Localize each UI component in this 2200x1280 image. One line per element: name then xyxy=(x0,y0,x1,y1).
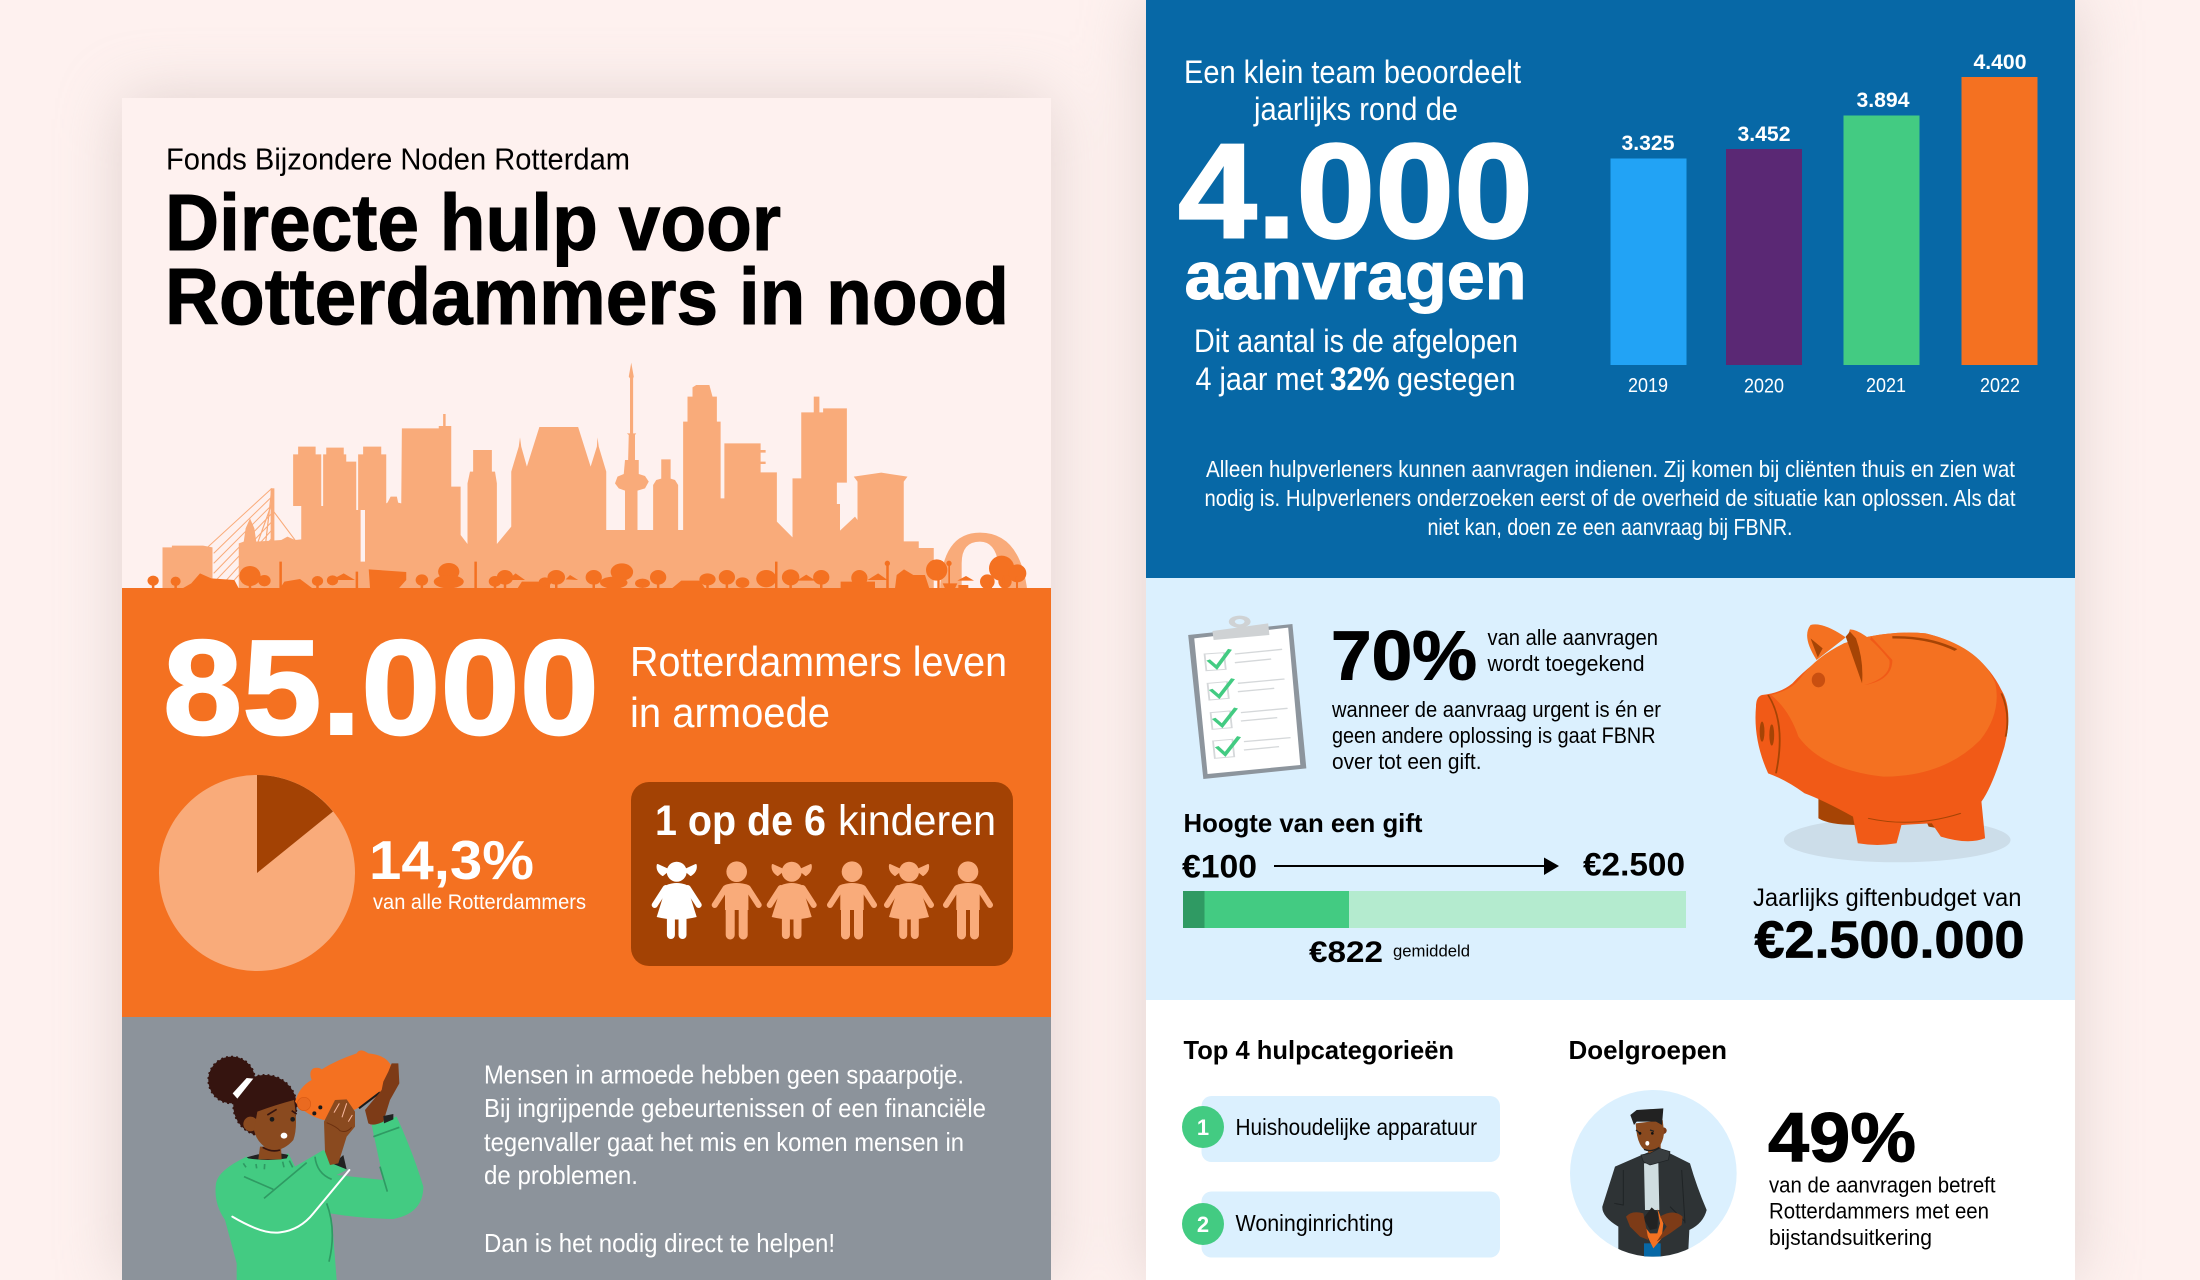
category 1: Huishoudelijke apparatuur xyxy=(1236,1114,1477,1140)
pie value: 14,3% xyxy=(369,829,534,891)
blue background xyxy=(1146,0,2075,578)
big word: aanvragen xyxy=(1184,238,1526,314)
illustration: man with empty wallet xyxy=(1570,1090,1737,1258)
growth text: 4 jaar met xyxy=(1196,361,1324,397)
explanation paragraph: niet kan, doen ze een aanvraag bij FBNR. xyxy=(1428,514,1792,540)
bar chart: 2020 xyxy=(1744,376,1784,398)
bar chart xyxy=(1610,51,2038,398)
stat caption xyxy=(1769,1172,1996,1250)
growth text xyxy=(1194,323,1518,397)
pie caption: van alle Rotterdammers xyxy=(373,891,586,914)
heading: top 4: Top 4 hulpcategorieën xyxy=(1184,1035,1454,1065)
panel: orange poverty stats xyxy=(122,588,1051,1017)
range max: €2.500 xyxy=(1583,846,1685,882)
panel: light blue gifts xyxy=(1146,578,2075,1000)
explanation paragraph: Alleen hulpverleners kunnen aanvragen indienen. Zij komen bij cliënten thuis en zien wat xyxy=(1206,456,2016,482)
pie chart xyxy=(159,775,355,971)
icon: piggy bank xyxy=(1755,624,2011,862)
body text xyxy=(484,1060,986,1258)
title xyxy=(165,178,1009,341)
big number: 85.000 xyxy=(163,612,599,763)
illustration: Rotterdam skyline xyxy=(148,363,1027,591)
body text: tegenvaller gaat het mis en komen mensen in xyxy=(484,1127,964,1157)
icon: clipboard checklist xyxy=(1188,616,1306,779)
callout heading xyxy=(655,797,996,845)
white background xyxy=(1146,1000,2075,1280)
intro text: jaarlijks rond de xyxy=(1253,91,1458,127)
big number caption: in armoede xyxy=(630,689,830,736)
growth text: Dit aantal is de afgelopen xyxy=(1194,323,1518,359)
big number: 4.000 xyxy=(1178,116,1533,266)
grey background xyxy=(122,1017,1051,1280)
panel: grey piggy bank text xyxy=(122,1017,1051,1280)
average caption: gemiddeld xyxy=(1393,942,1470,960)
condition text: wanneer de aanvraag urgent is én er xyxy=(1331,697,1661,722)
body text: Mensen in armoede hebben geen spaarpotje. xyxy=(484,1060,964,1090)
range bar xyxy=(1183,891,1686,928)
body text: Bij ingrijpende gebeurtenissen of een financiële xyxy=(484,1093,986,1123)
kicker: Fonds Bijzondere Noden Rotterdam xyxy=(166,142,630,176)
panel: blue applications xyxy=(1146,0,2075,578)
header background xyxy=(122,98,1051,590)
category 2: 2 xyxy=(1197,1212,1209,1237)
heading: gift size: Hoogte van een gift xyxy=(1184,808,1423,838)
illustration: woman looking into piggy bank xyxy=(208,1050,423,1280)
bar chart: 3.894 xyxy=(1856,89,1910,112)
bar chart: 3.325 xyxy=(1622,132,1675,155)
title: Directe hulp voor xyxy=(165,178,781,267)
average value: €822 xyxy=(1309,936,1383,969)
explanation paragraph: nodig is. Hulpverleners onderzoeken eerst of de overheid de situatie kan oplossen. Als dat xyxy=(1204,485,2016,511)
panel: white categories and target groups xyxy=(1146,1000,2075,1280)
stat caption: Rotterdammers met een xyxy=(1769,1198,1989,1224)
category 2: Woninginrichting xyxy=(1236,1210,1394,1236)
light blue background xyxy=(1146,578,2075,1000)
category 1 xyxy=(1182,1096,1500,1162)
icon: child figures xyxy=(655,861,990,935)
stat caption: van alle aanvragen xyxy=(1488,625,1658,650)
growth text: 32% xyxy=(1330,361,1390,397)
bar chart: 2019 xyxy=(1628,375,1668,397)
intro text: Een klein team beoordeelt xyxy=(1184,54,1521,90)
category 1: 1 xyxy=(1197,1115,1209,1140)
big number caption: Rotterdammers leven xyxy=(630,638,1007,685)
condition text xyxy=(1331,697,1661,774)
body text: Dan is het nodig direct te helpen! xyxy=(484,1228,835,1258)
callout: children xyxy=(631,782,1013,966)
bar chart: 2022 xyxy=(1980,375,2020,397)
stat caption: bijstandsuitkering xyxy=(1769,1225,1932,1250)
bar chart: 4.400 xyxy=(1974,51,2026,74)
big number caption xyxy=(630,638,1007,736)
callout heading: 1 op de 6 xyxy=(655,797,826,845)
intro text xyxy=(1184,54,1521,127)
budget value: €2.500.000 xyxy=(1754,912,2024,970)
budget label: Jaarlijks giftenbudget van xyxy=(1753,884,2022,912)
explanation paragraph xyxy=(1204,456,2016,540)
growth text: gestegen xyxy=(1397,361,1516,397)
panel: left poverty column xyxy=(122,98,1051,1280)
stat caption xyxy=(1487,625,1658,676)
condition text: over tot een gift. xyxy=(1332,749,1482,774)
stat: 70%: 70% xyxy=(1331,616,1477,694)
title: Rotterdammers in nood xyxy=(165,252,1009,341)
bar chart: 3.452 xyxy=(1738,123,1790,146)
stat: 49%: 49% xyxy=(1768,1098,1916,1176)
heading: target groups: Doelgroepen xyxy=(1568,1035,1727,1065)
arrow xyxy=(1274,858,1559,875)
bar chart: 2021 xyxy=(1866,375,1906,397)
category 2 xyxy=(1182,1192,1500,1258)
condition text: geen andere oplossing is gaat FBNR xyxy=(1332,723,1656,748)
range min: €100 xyxy=(1182,848,1257,884)
callout heading: kinderen xyxy=(838,797,996,845)
body text: de problemen. xyxy=(484,1160,638,1190)
orange background xyxy=(122,588,1051,1017)
stat caption: van de aanvragen betreft xyxy=(1769,1172,1996,1198)
stat caption: wordt toegekend xyxy=(1487,651,1644,676)
